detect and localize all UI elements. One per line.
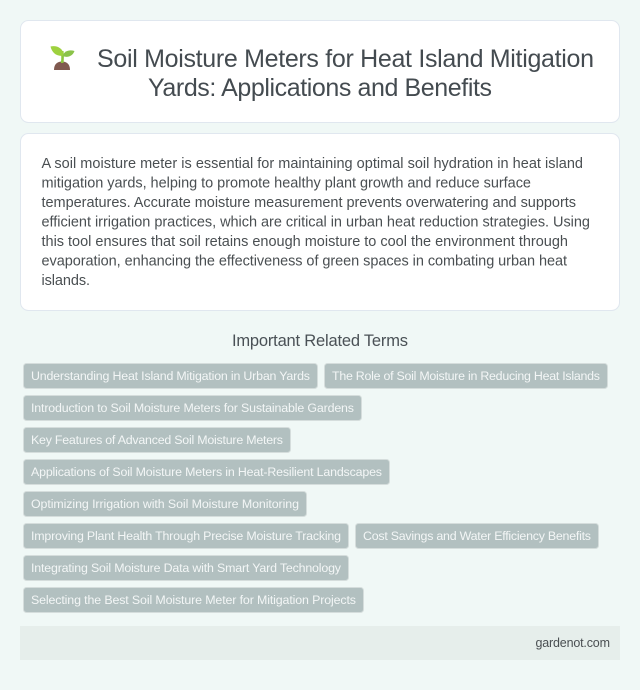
chip: key features bbox=[24, 428, 290, 452]
panel: description bbox=[20, 134, 620, 310]
chip: applications bbox=[24, 460, 390, 484]
chip: cost savings: Cost Savings and Water Efficiency Benefits bbox=[363, 529, 591, 543]
chip: introduction to soil moisture meters bbox=[24, 396, 362, 420]
heading: title: Soil Moisture Meters for Heat Island Mitigation bbox=[97, 45, 594, 73]
icon: seedling bbox=[50, 46, 74, 70]
panel: title header bbox=[20, 20, 620, 122]
chip: understanding heat island mitigation bbox=[24, 364, 318, 388]
heading: title bbox=[97, 45, 594, 102]
text block: description paragraph: islands. bbox=[42, 273, 90, 289]
panel: related term chips bbox=[24, 364, 608, 612]
chip: key features: Key Features of Advanced Soil Moisture Meters bbox=[31, 433, 283, 447]
chip: selecting the best meter bbox=[24, 588, 364, 612]
chip: integrating soil moisture data: Integrating Soil Moisture Data with Smart Yard Technology bbox=[31, 561, 342, 575]
chip: role of soil moisture: The Role of Soil Moisture in Reducing Heat Islands bbox=[332, 369, 600, 383]
chip: role of soil moisture bbox=[324, 364, 608, 388]
text block: description paragraph: temperatures. Accurate moisture measurement prevents overwatering and supports bbox=[42, 195, 576, 211]
footer bbox=[20, 626, 620, 660]
text block: description paragraph: evaporation, enhancing the effectiveness of green spaces in combating urban heat bbox=[42, 254, 567, 270]
text block: description paragraph bbox=[42, 156, 590, 289]
chip: improving plant health bbox=[24, 524, 348, 548]
text block: description paragraph: mitigation yards, helping to promote healthy plant growth and reduce surface bbox=[42, 176, 531, 192]
text block: description paragraph: this tool ensures that soil retains enough moisture to cool the environment through bbox=[42, 234, 568, 250]
chip: optimizing irrigation: Optimizing Irrigation with Soil Moisture Monitoring bbox=[31, 497, 299, 511]
heading: title: Yards: Applications and Benefits bbox=[148, 74, 492, 102]
chip: integrating soil moisture data bbox=[24, 556, 348, 580]
footer: site name: gardenot.com bbox=[536, 636, 610, 650]
chip: understanding heat island mitigation: Understanding Heat Island Mitigation in Urban Yards bbox=[31, 369, 310, 383]
chip: optimizing irrigation bbox=[24, 492, 306, 516]
chip: selecting the best meter: Selecting the Best Soil Moisture Meter for Mitigation Projects bbox=[31, 593, 356, 607]
text block: description paragraph: A soil moisture meter is essential for maintaining optimal soil hydration in heat island bbox=[42, 156, 583, 172]
heading: important related terms: Important Related Terms bbox=[232, 332, 408, 350]
chip: introduction to soil moisture meters: Introduction to Soil Moisture Meters for Sustainable Gardens bbox=[31, 401, 354, 415]
chip: applications: Applications of Soil Moisture Meters in Heat-Resilient Landscapes bbox=[31, 465, 382, 479]
chip: cost savings bbox=[356, 524, 598, 548]
chip: improving plant health: Improving Plant Health Through Precise Moisture Tracking bbox=[31, 529, 341, 543]
text block: description paragraph: efficient irrigation practices, which are critical in urban heat reduction strategies. Using bbox=[42, 215, 590, 231]
